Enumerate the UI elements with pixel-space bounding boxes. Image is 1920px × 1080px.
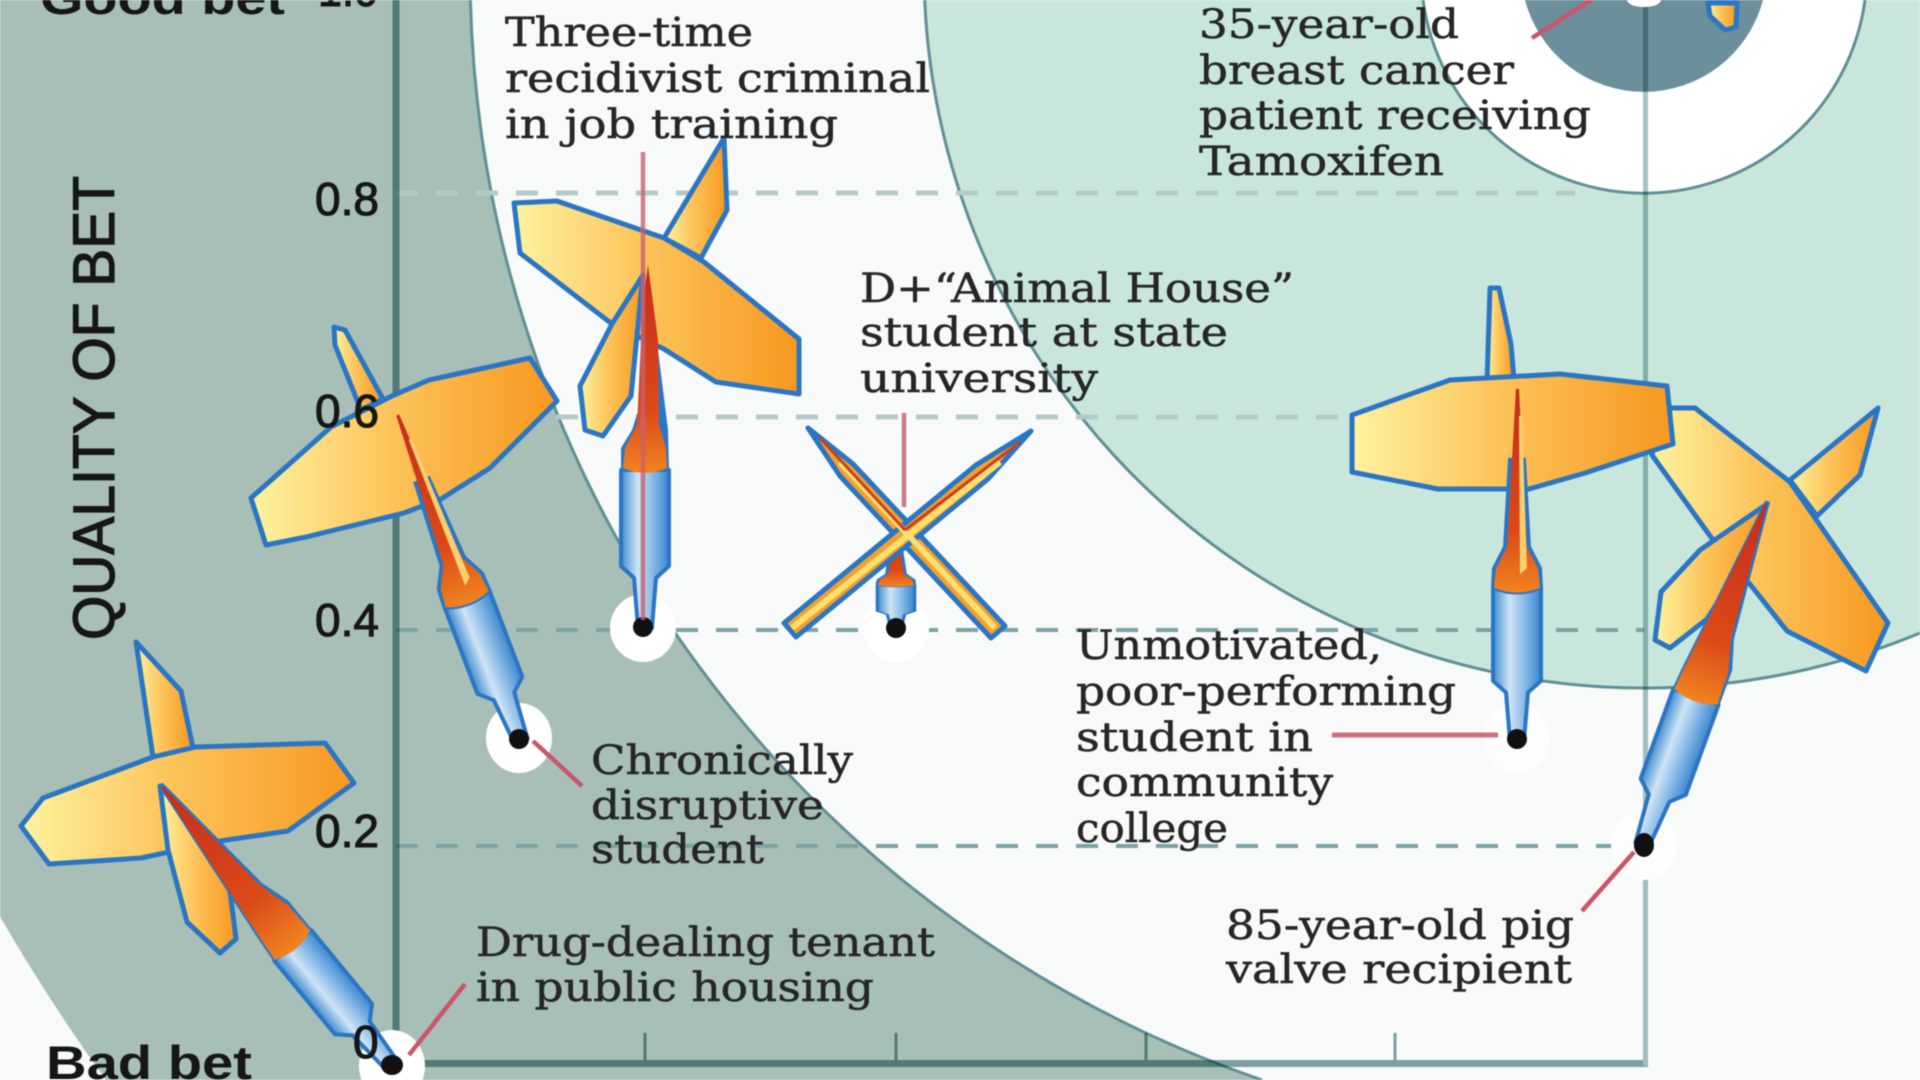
y-axis tick labels [315, 0, 379, 1068]
dart: drug-dealing tenant [21, 642, 412, 1080]
callout: pig valve recipient [1225, 852, 1634, 993]
impact halos around dart tips [359, 0, 1677, 1080]
target bullseye [1525, 0, 1763, 92]
target ring: inner white band [1423, 0, 1865, 193]
callout: three-time recidivist criminal: Three-time [505, 10, 753, 56]
callout: chronically disruptive student [533, 738, 853, 873]
callout: D+ student: D+“Animal House” [860, 266, 1294, 312]
y-axis tick labels: 0 [353, 1016, 379, 1068]
callout: chronically disruptive student: student [591, 827, 764, 873]
y-axis tick labels: 0.8 [315, 173, 379, 225]
callout: drug-dealing tenant [409, 920, 935, 1055]
callout: breast cancer patient: 35-year-old [1199, 2, 1459, 48]
callout: D+ student [860, 266, 1294, 507]
callout: three-time recidivist criminal [505, 10, 930, 620]
callout: chronically disruptive student: Chronically [591, 738, 853, 784]
callout: drug-dealing tenant: in public housing [476, 965, 874, 1011]
chart axes and ticks [396, 0, 1648, 1066]
dart in bullseye: visible flight fragment [1708, 3, 1737, 30]
y-axis heading: QUALITY OF BET [62, 176, 127, 640]
callout: D+ student: student at state [860, 310, 1228, 356]
callout: pig valve recipient: 85-year-old pig [1226, 903, 1574, 949]
callout: unmotivated community college student: community [1076, 760, 1333, 806]
callout: drug-dealing tenant: Drug-dealing tenant [476, 920, 935, 966]
callout: unmotivated community college student: Unmotivated, [1076, 623, 1382, 669]
dart: three-time recidivist criminal [514, 138, 799, 637]
target ring: mint band [925, 0, 1920, 688]
y-axis tick labels: 0.6 [315, 385, 379, 437]
callout: breast cancer patient: Tamoxifen [1199, 139, 1444, 185]
callout: unmotivated community college student: student in [1076, 715, 1313, 761]
dart: unmotivated student [1352, 288, 1673, 749]
callout: unmotivated community college student [1076, 623, 1498, 852]
callout: breast cancer patient: patient receiving [1199, 93, 1591, 139]
target ring: white band [470, 0, 1920, 1080]
callout: three-time recidivist criminal: recidivist criminal [505, 56, 930, 102]
callout: breast cancer patient [1199, 0, 1591, 185]
callout: breast cancer patient: breast cancer [1199, 48, 1515, 94]
callout: chronically disruptive student: disruptive [591, 783, 824, 829]
y-axis tick labels: 0.2 [315, 805, 379, 857]
callout: D+ student: university [860, 356, 1098, 402]
dart: 85-year-old pig valve recipient [1619, 408, 1888, 857]
callout: unmotivated community college student: poor-performing [1076, 669, 1456, 715]
callout: unmotivated community college student: college [1076, 806, 1228, 852]
callout: three-time recidivist criminal: in job training [505, 102, 838, 148]
dart: chronically disruptive student [251, 327, 557, 750]
callout: pig valve recipient: valve recipient [1225, 947, 1572, 993]
y-axis tick labels: 0.4 [315, 594, 379, 646]
dart: D+ student at state university [784, 428, 1031, 638]
